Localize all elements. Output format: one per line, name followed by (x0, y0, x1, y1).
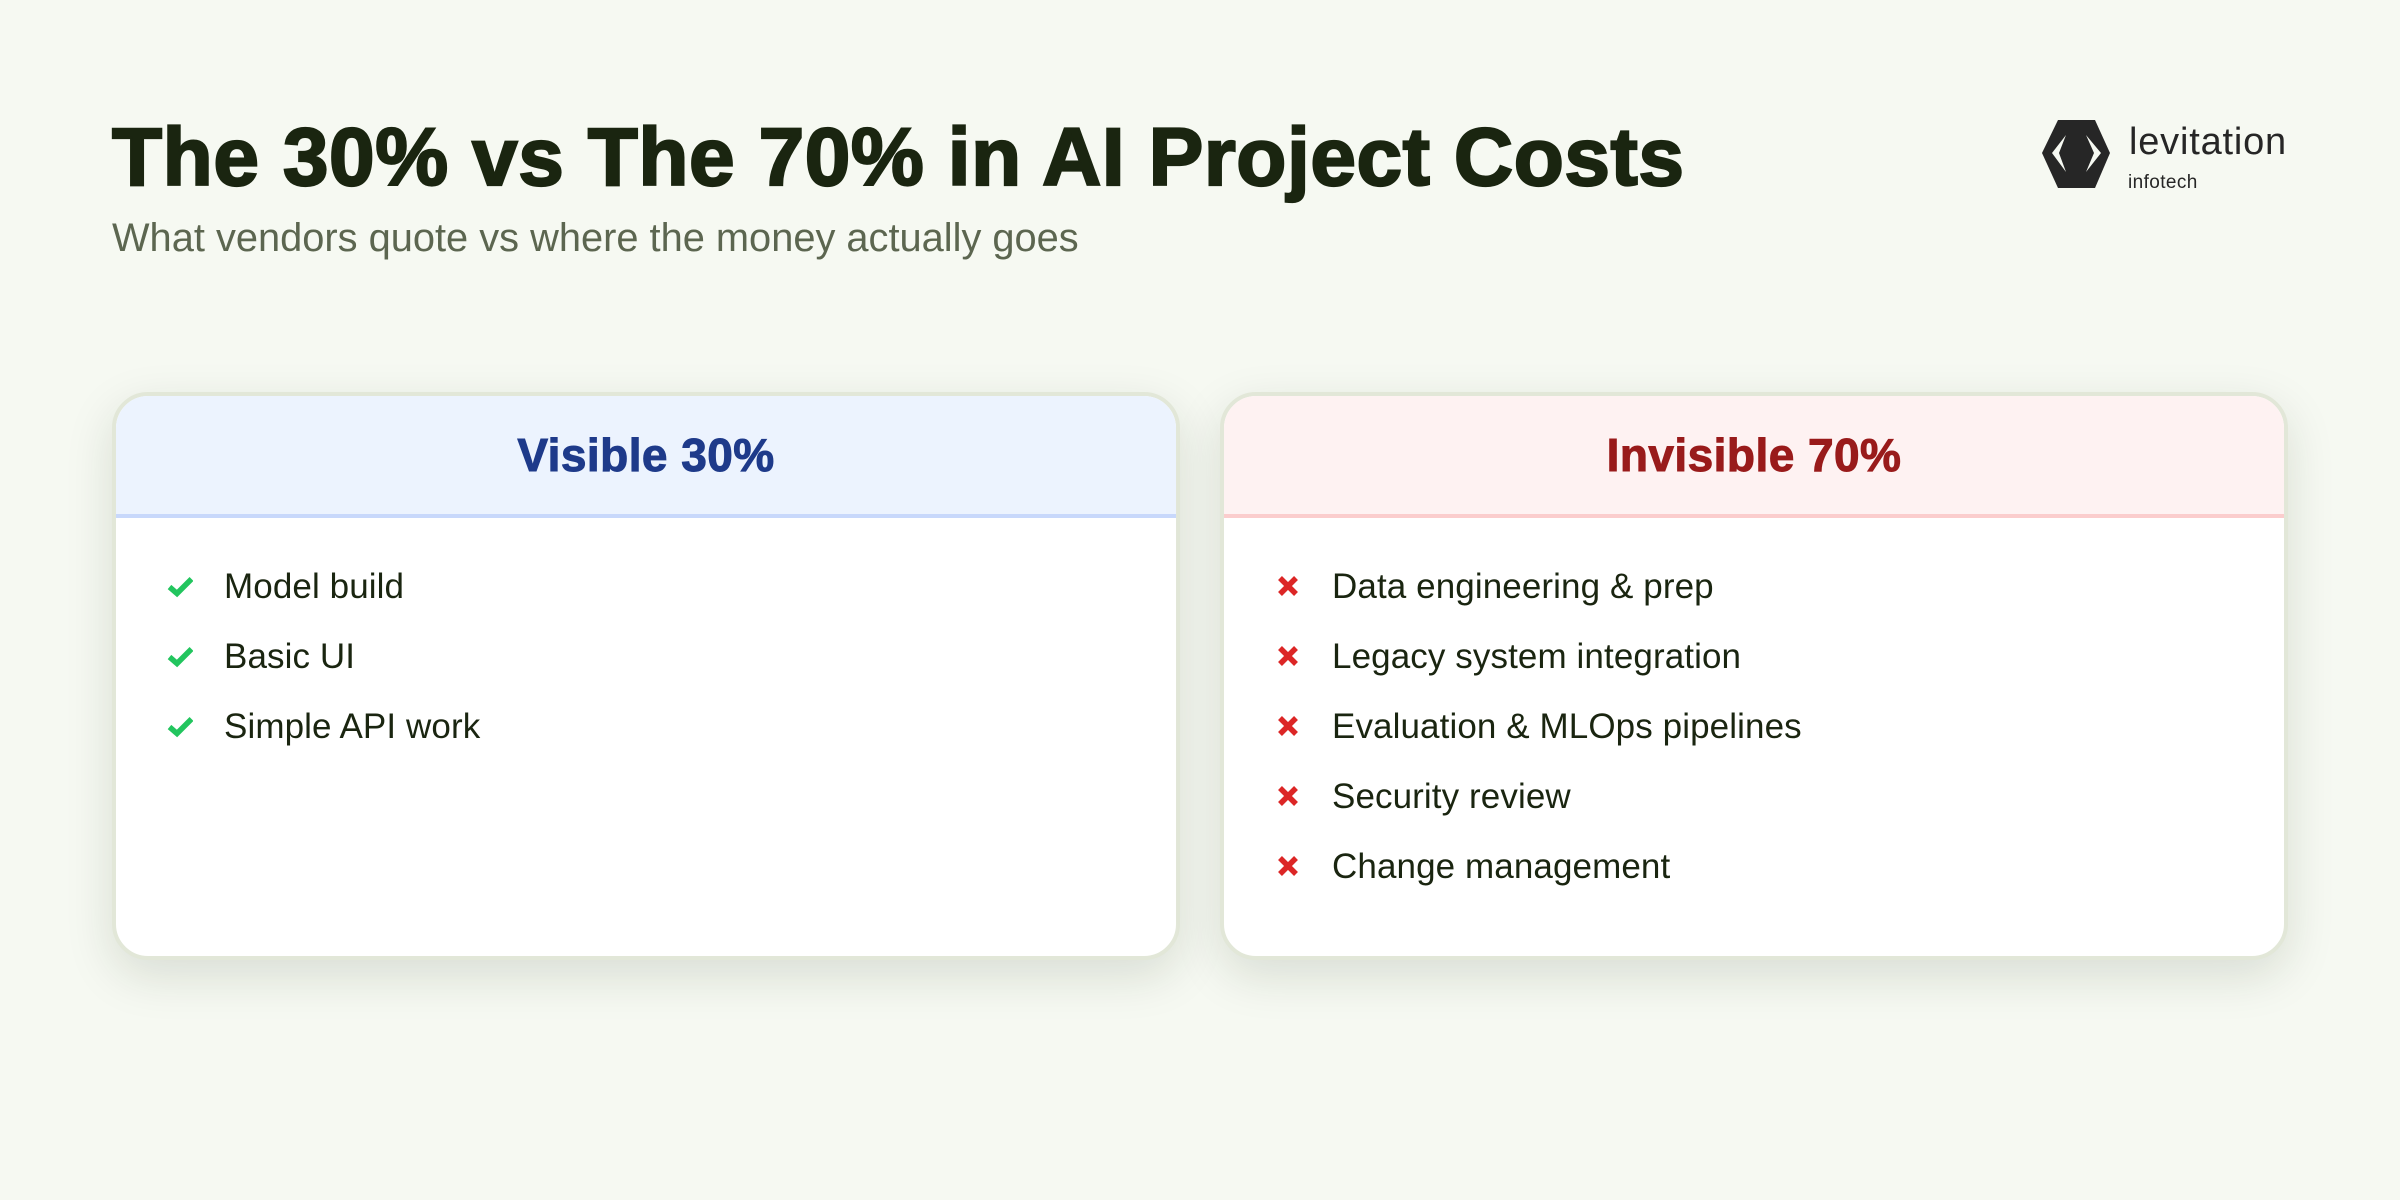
item: legacy integration: Legacy system integration (1332, 637, 1741, 676)
logo subtext: infotech (2128, 172, 2198, 193)
panel: visible 30% (112, 392, 1180, 960)
item: data engineering: Data engineering & prep (1332, 567, 1714, 606)
logo: levitation infotech (2042, 120, 2287, 193)
heading: invisible 70%: Invisible 70% (1607, 429, 1901, 481)
icon: hexagon brackets (2042, 120, 2110, 188)
panel: invisible 70% (1220, 392, 2288, 960)
item: model build: Model build (224, 567, 404, 606)
heading: visible 30%: Visible 30% (517, 429, 775, 481)
heading: visible 30% (116, 396, 1176, 518)
item: security review: Security review (1332, 777, 1571, 816)
subtitle: What vendors quote vs where the money actually goes (112, 216, 1079, 260)
heading: invisible 70% (1224, 396, 2284, 518)
item: change management: Change management (1332, 847, 1670, 886)
title: The 30% vs The 70% in AI Project Costs (112, 112, 1685, 203)
item: evaluation and mlops: Evaluation & MLOps pipelines (1332, 707, 1802, 746)
item: simple api work: Simple API work (224, 707, 480, 746)
logo wordmark: levitation (2129, 121, 2287, 163)
item: basic ui (168, 637, 355, 676)
item: basic ui: Basic UI (224, 637, 355, 676)
